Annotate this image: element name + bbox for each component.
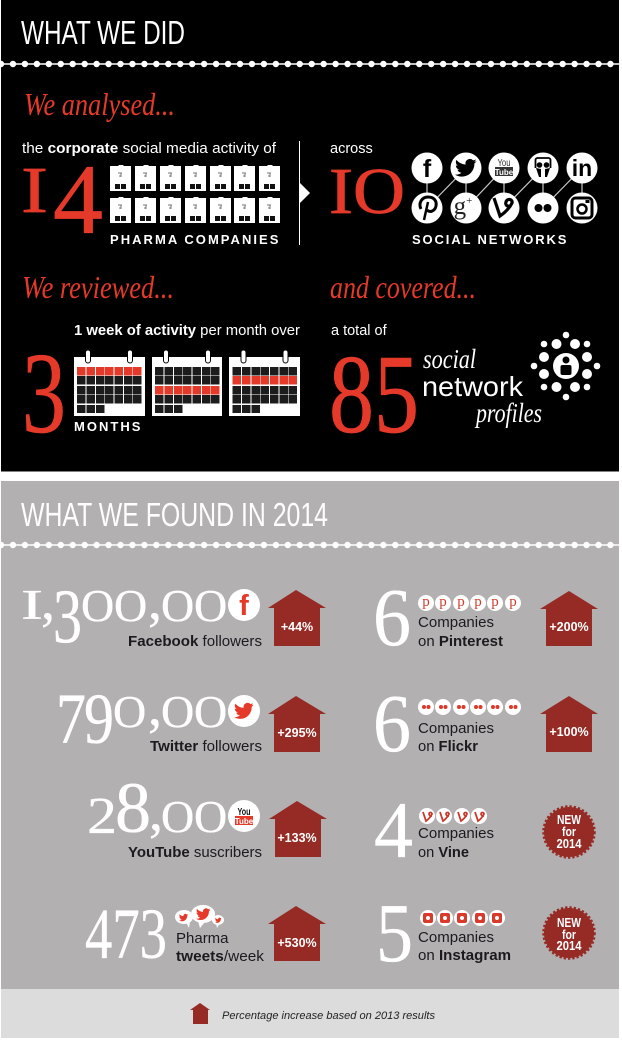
icons: flickr [418, 699, 521, 715]
number: 14: 4 [53, 144, 103, 255]
number: 1,300,000: O [161, 580, 194, 631]
icons: pinterest: p [439, 594, 447, 610]
number: 28,000: 8 [115, 768, 151, 848]
icon: linkedin: in [572, 155, 592, 181]
badge: new for 2014 [544, 806, 594, 858]
number: 6: 6 [373, 571, 411, 663]
icon: instagram [572, 198, 592, 218]
label: companies on vine [418, 825, 494, 861]
icons: pinterest: p [509, 594, 517, 610]
label: pharma tweets per week: Pharma [176, 930, 229, 947]
icons: vine [419, 808, 487, 824]
social network icons [412, 152, 598, 224]
stat: pinterest companies [373, 571, 598, 663]
badge: +295%: +295% [277, 726, 317, 740]
badge: +44%: +44% [281, 620, 313, 634]
icon: google plus: g [454, 193, 466, 220]
panel: what we found in 2014 [1, 481, 619, 989]
icons: pinterest: p [457, 594, 465, 610]
badge: +200%: +200% [549, 620, 589, 634]
badge: +100% [540, 696, 598, 752]
number: 1,300,000: O [114, 580, 147, 631]
label: companies on flickr: Companies [418, 720, 494, 737]
panel: what we did [1, 0, 619, 472]
label: facebook followers: Facebook followers [128, 633, 262, 650]
label: companies on pinterest: on Pinterest [418, 633, 503, 650]
number: 1,300,000: 3 [53, 573, 82, 659]
icon: legend house [190, 1003, 210, 1024]
text: social network profiles: social [423, 344, 476, 374]
badge: +100%: +100% [549, 725, 589, 739]
icons: pinterest: p [474, 594, 482, 610]
heading: what we found: WHAT WE FOUND IN 2014 [21, 496, 328, 533]
icon: youtube [495, 158, 514, 177]
number: 1,300,000: O [81, 580, 114, 631]
label: companies on instagram: on Instagram [418, 947, 511, 964]
icon: twitter [455, 159, 477, 177]
number: 1,300,000: , [41, 570, 55, 632]
footer legend [1, 989, 619, 1038]
label: twitter followers: Twitter followers [150, 738, 262, 755]
icon: youtube: Tube [495, 168, 514, 177]
number: 4: 4 [374, 787, 413, 875]
icon: pinterest [420, 197, 436, 220]
badge: +133% [269, 801, 327, 857]
number: 3: 3 [22, 330, 66, 457]
arrow divider [299, 141, 310, 245]
badge: +200% [540, 591, 598, 646]
label: companies on vine: on Vine [418, 844, 469, 861]
badge: new for 2014: 2014 [556, 938, 582, 953]
number: 10: IO [329, 155, 405, 228]
icon: calendar 1 [74, 350, 145, 416]
icon: flickr [534, 204, 552, 212]
icon: youtube [228, 800, 260, 832]
number: 1,300,000 [21, 570, 227, 659]
label: companies on flickr [418, 720, 494, 755]
text: social network profiles: network [422, 371, 524, 402]
number: 14: I [21, 154, 48, 227]
label: social networks: SOCIAL NETWORKS [412, 232, 568, 247]
text: a total of: a total of [331, 323, 388, 339]
number: 28,000: O [161, 791, 194, 842]
icon: youtube: Tube [235, 817, 254, 826]
icon: youtube: You [238, 807, 250, 818]
badge: new for 2014 [544, 908, 594, 958]
icon: facebook: f [239, 590, 249, 622]
badge: new for 2014: 2014 [556, 836, 582, 851]
subheading: we analysed: We analysed... [24, 86, 175, 122]
icon: twitter [228, 695, 260, 727]
number: 790,000: , [148, 676, 162, 738]
badge: +133%: +133% [277, 831, 317, 845]
stat: youtube subscribers [87, 768, 327, 861]
icon: calendar 2 [152, 350, 222, 416]
icons: pinterest: p [422, 594, 430, 610]
number: 85: 85 [329, 333, 419, 457]
icons: 14 company buildings [110, 165, 280, 223]
label: youtube subscribers: YouTube suscribers [128, 844, 262, 861]
icon: facebook [228, 589, 260, 622]
icon: network of people [531, 332, 600, 400]
number: 790,000: O [161, 686, 194, 737]
icon: tweet bubbles [175, 905, 224, 928]
number: 28,000: 2 [87, 788, 117, 845]
label: companies on instagram [418, 929, 511, 964]
number: 473: 473 [85, 894, 167, 974]
icon: calendar 3 [229, 350, 300, 416]
number: 1,300,000: O [194, 580, 227, 631]
number: 790,000: 9 [84, 679, 114, 759]
label: companies on flickr: on Flickr [418, 738, 478, 755]
icon: google plus: + [466, 195, 472, 207]
icons: pinterest: p [491, 594, 499, 610]
number: 28,000: , [149, 781, 163, 843]
label: pharma companies: PHARMA COMPANIES [110, 232, 280, 247]
subheading: we reviewed: We reviewed... [22, 269, 174, 305]
stat: twitter followers [56, 676, 326, 759]
label: companies on instagram: Companies [418, 929, 494, 946]
stat: flickr companies [373, 677, 598, 769]
badge: new for 2014: NEW [557, 812, 582, 827]
number: 790,000 [56, 676, 227, 759]
badge: new for 2014: for [562, 927, 576, 942]
subheading: and covered: and covered... [330, 269, 476, 305]
stat: vine companies [374, 787, 594, 875]
text: social network profiles: profiles [474, 398, 542, 428]
text: across: across [330, 141, 373, 157]
number: 28,000 [87, 768, 227, 848]
heading: what we did: WHAT WE DID [21, 14, 185, 51]
label: pharma tweets per week [176, 930, 265, 965]
badge: +530%: +530% [277, 936, 317, 950]
badge: +295% [268, 696, 326, 752]
icon: slideshare [536, 158, 550, 177]
number: 6: 6 [373, 677, 411, 769]
label: companies on pinterest [418, 614, 503, 650]
number: 1,300,000: I [21, 583, 43, 629]
number: 790,000: 7 [56, 679, 86, 759]
number: 5: 5 [376, 887, 413, 980]
stat: pharma tweets [85, 894, 326, 974]
number: 790,000: O [194, 686, 227, 737]
badge: +530% [268, 906, 326, 961]
icon: vine [494, 198, 512, 216]
badge: new for 2014: for [562, 824, 576, 839]
badge: +44% [268, 590, 326, 646]
number: 28,000: O [194, 791, 227, 842]
number: 1,300,000: , [148, 570, 162, 632]
label: companies on pinterest: Companies [418, 614, 494, 631]
icon: youtube: You [498, 158, 510, 169]
stat: instagram companies [376, 887, 594, 980]
icon: facebook: f [423, 155, 432, 183]
text: corporate activity: the corporate social media activity of [22, 141, 277, 157]
label: companies on vine: Companies [418, 825, 494, 842]
text: one week of activity: 1 week of activity per month over [74, 323, 300, 339]
label: pharma tweets per week: tweets/week [176, 948, 265, 965]
text: legend note: Percentage increase based on 2013 results [222, 1010, 435, 1022]
text: social network profiles [422, 344, 542, 428]
icons: pinterest [418, 594, 521, 611]
icons: instagram [420, 910, 505, 926]
label: months: MONTHS [74, 419, 142, 434]
number: 14 [21, 144, 103, 255]
badge: new for 2014: NEW [557, 915, 582, 930]
stat: facebook followers [21, 570, 326, 659]
number: 790,000: O [113, 686, 146, 737]
